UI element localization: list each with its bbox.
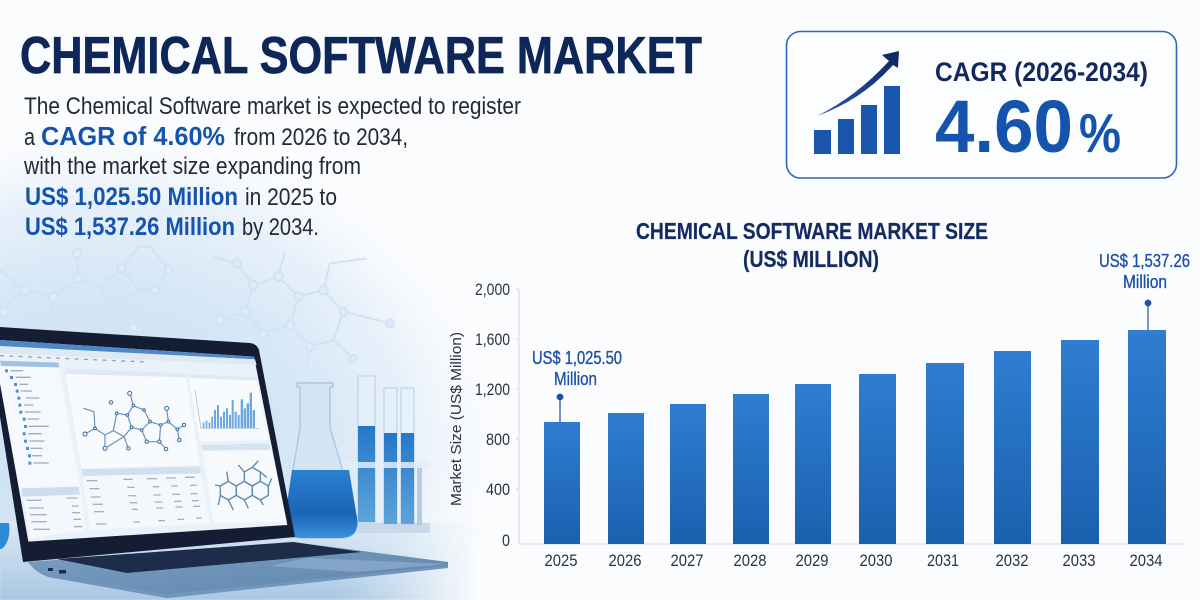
intro paragraph: CAGR of 4.60% <box>41 121 225 151</box>
molecule panel <box>65 368 200 468</box>
laptop base <box>28 542 448 598</box>
x-axis labels <box>544 551 1162 570</box>
background <box>0 169 466 600</box>
callout: 2025 value: Million <box>554 369 597 389</box>
callout: 2034 value <box>1099 251 1190 330</box>
axes <box>519 289 1185 544</box>
small flask at left edge <box>0 523 9 549</box>
intro paragraph: in 2025 to <box>245 184 337 211</box>
intro paragraph <box>23 93 521 241</box>
x-axis labels: 2032 <box>996 551 1028 570</box>
CAGR callout panel <box>786 32 1176 178</box>
data table panel <box>82 467 210 530</box>
x-axis labels: 2028 <box>734 551 766 570</box>
y-axis labels: 400 <box>486 480 510 499</box>
CAGR value: 4.60 <box>935 85 1073 168</box>
callout: 2034 value: Million <box>1123 272 1167 292</box>
y-axis labels <box>475 280 510 550</box>
molecule network background <box>0 247 394 367</box>
intro paragraph: The Chemical Software market is expected to register <box>24 93 521 120</box>
chart heading <box>636 218 988 272</box>
intro paragraph: US$ 1,537.26 Million <box>25 213 235 241</box>
y-axis labels: 2,000 <box>475 280 510 299</box>
intro paragraph: with the market size expanding from <box>23 153 361 180</box>
second molecule panel <box>202 443 287 523</box>
laptop screen bezel <box>0 327 295 562</box>
x-axis labels: 2029 <box>796 551 828 570</box>
x-axis labels: 2030 <box>860 551 892 570</box>
title: CHEMICAL SOFTWARE MARKET <box>20 27 702 85</box>
title bar <box>0 340 255 359</box>
y-axis labels: 0 <box>502 531 510 550</box>
intro paragraph: from 2026 to 2034, <box>234 124 408 151</box>
x-axis labels: 2026 <box>608 551 642 570</box>
bar chart panel on screen <box>188 374 268 442</box>
icon: rising bars with arrow <box>814 51 900 154</box>
x-axis labels: 2033 <box>1062 551 1096 570</box>
x-axis labels: 2034 <box>1130 551 1162 570</box>
callout: 2025 value: US$ 1,025.50 <box>532 348 622 368</box>
test tube rack <box>322 376 430 533</box>
x-axis labels: 2025 <box>544 551 578 570</box>
CAGR value: % <box>1079 102 1121 164</box>
y-axis labels: 1,200 <box>475 380 510 399</box>
side data panel <box>22 487 86 538</box>
y-axis labels: 1,600 <box>475 330 510 349</box>
CAGR label: CAGR (2026-2034) <box>935 57 1148 87</box>
x-axis labels: 2031 <box>927 551 959 570</box>
chart heading: (US$ MILLION) <box>743 246 879 272</box>
bars <box>544 330 1166 544</box>
callout: 2025 value <box>532 348 622 422</box>
sidebar panel <box>0 360 80 490</box>
toolbar <box>0 347 257 365</box>
laptop screen app window <box>0 340 287 542</box>
x-axis labels: 2027 <box>670 551 704 570</box>
intro paragraph: a <box>24 124 36 151</box>
y-axis title: Market Size (US$ Million) <box>448 332 465 506</box>
intro paragraph: US$ 1,025.50 Million <box>25 183 238 211</box>
y-axis labels: 800 <box>486 430 510 449</box>
chart heading: CHEMICAL SOFTWARE MARKET SIZE <box>636 218 988 244</box>
erlenmeyer flask <box>285 383 357 538</box>
illustration: laptop and lab glassware <box>0 247 448 598</box>
bar chart: market size <box>448 251 1190 570</box>
intro paragraph: by 2034. <box>242 214 319 241</box>
